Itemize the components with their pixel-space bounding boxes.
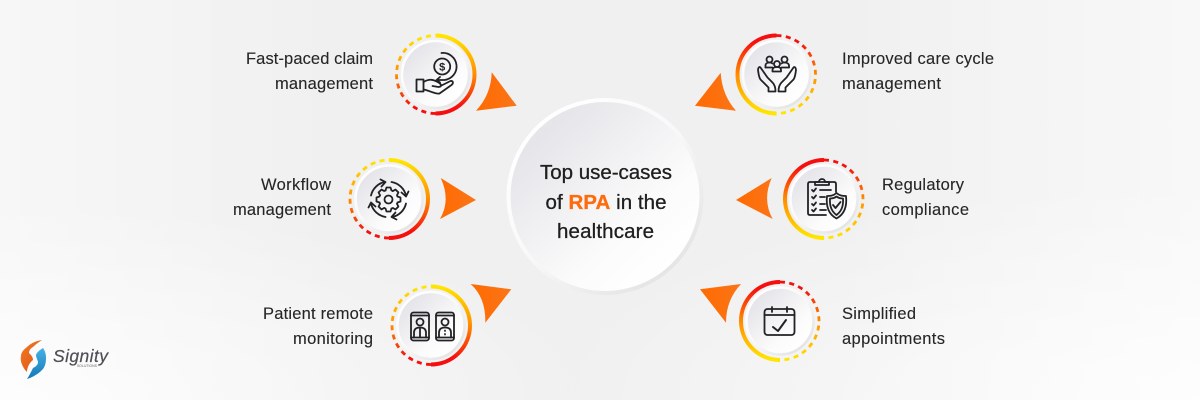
hub heading: healthcare: [557, 220, 654, 243]
label: appointments: [842, 330, 945, 348]
label: compliance: [882, 201, 969, 219]
label: monitoring: [293, 330, 373, 348]
label: Workflow: [261, 176, 331, 194]
label: Simplified: [842, 305, 916, 323]
label: [842, 305, 945, 348]
icon: calendar with check: [764, 307, 794, 335]
logo mark: [21, 340, 46, 379]
ring: [741, 282, 819, 360]
label: Regulatory: [882, 176, 965, 194]
hub heading: of RPA in the: [546, 191, 666, 214]
hub heading: Top use-cases: [540, 161, 672, 184]
label: [263, 305, 373, 348]
panel: workflow management: [233, 160, 428, 238]
label: [882, 176, 969, 219]
icon: hand with coin: [416, 53, 457, 94]
panel: improved care cycle management: [738, 36, 994, 114]
ring: [396, 36, 474, 114]
icon: clipboard with shield: [808, 179, 846, 218]
panel: patient remote monitoring: [263, 286, 470, 364]
label: Fast-paced claim: [246, 50, 373, 68]
arrow: top-left: [476, 72, 517, 111]
label: Improved care cycle: [842, 50, 994, 68]
panel: regulatory compliance: [785, 160, 969, 238]
logo wordmark: SOLUTIONS: [77, 364, 98, 368]
label: management: [275, 75, 373, 93]
label: management: [233, 201, 331, 219]
ring: [392, 286, 470, 364]
arrow: top-right: [695, 73, 736, 111]
icon: hands holding people: [758, 56, 796, 92]
logo: Signity Solutions: [21, 340, 109, 379]
label: [246, 50, 373, 93]
label: [842, 50, 994, 93]
panel: central hub: [508, 100, 702, 293]
arrow: bottom-right: [700, 284, 741, 323]
hub disc: [508, 100, 702, 293]
label: Patient remote: [263, 305, 373, 323]
ring: [785, 160, 863, 238]
hub heading: [540, 161, 672, 243]
ring: [738, 36, 816, 114]
label: [233, 176, 331, 219]
arrow: bottom-left: [471, 284, 511, 323]
ring: [350, 160, 428, 238]
icon: two phones with people: [411, 312, 454, 340]
logo wordmark: Signity: [53, 346, 109, 366]
panel: simplified appointments: [741, 282, 945, 360]
icon: gear with cycle arrows: [368, 180, 408, 220]
label: management: [842, 75, 941, 93]
panel: fast-paced claim management: [246, 36, 474, 114]
icon: hand with coin: $: [439, 62, 445, 74]
arrow: middle-left: [440, 178, 476, 219]
arrow: middle-right: [736, 178, 773, 219]
